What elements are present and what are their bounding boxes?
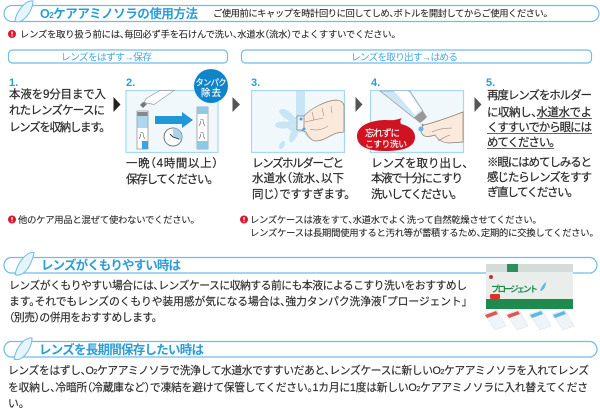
callout: rub without forgetting [357, 118, 415, 151]
step 3: 水道水（流水、以下 [252, 171, 344, 185]
step 3 [251, 77, 350, 201]
arrow: step 2 to 3 [232, 97, 240, 112]
label: take out and insert [242, 50, 592, 64]
step 4: 4. [371, 77, 380, 89]
step 4: 本液で十分にこすり [371, 171, 463, 185]
text: foggy lens advice: ます。それでもレンズのくもりや装用感が気になる場合は、強力タンパク洗浄液「プロージェント」 [9, 294, 467, 308]
icon: contact lens [15, 252, 34, 275]
heading: long-term storage: レンズを長期間保存したい時は [39, 342, 204, 357]
step 3: レンズホルダーごと [252, 156, 344, 170]
heading: usage: O2ケアアミノソラの使用方法 [40, 6, 198, 21]
step 5: に収納し、水道水でよ [487, 105, 592, 119]
label: take out and insert: レンズを取り出す→はめる [351, 50, 458, 64]
text: long-term storage advice [8, 363, 589, 408]
label: remove and store [8, 50, 228, 64]
step 2: 保存してください。 [126, 172, 213, 186]
icon: contact lens [15, 1, 33, 22]
step 5: めてください。 [487, 136, 555, 149]
step 1: 本液を9分目まで入 [9, 87, 106, 101]
callout: wash hands: レンズを取り扱う前には、毎回必ず手を石けんで洗い、水道水（流水）でよくすすいでください。 [20, 28, 396, 40]
step 2 [126, 69, 228, 186]
step 5: 感じたらレンズをすす [487, 170, 592, 184]
callout: rub without forgetting: 忘れずに [365, 128, 400, 140]
illustration: overnight storage [126, 90, 218, 152]
badge: protein removal [194, 69, 228, 103]
arrow: step 1 to 2 [114, 97, 120, 112]
step 5 [486, 77, 592, 199]
icon: contact lens [14, 338, 32, 360]
panel: foggy lens header [4, 252, 597, 275]
step 4 [357, 77, 468, 201]
panel: long-term storage header [4, 338, 597, 360]
step 3: 同じ）ですすぎます。 [252, 187, 350, 201]
text: foggy lens advice: （別売）の併用をおすすめします。 [9, 310, 157, 324]
text: long-term storage advice: を収納し、冷暗所（冷蔵庫など）で凍結を避けて保管してください。1カ月に1度は新しいO2ケアアミノソラに入れ替えてくださ [8, 380, 588, 394]
text: foggy lens advice [9, 278, 467, 324]
label: remove and store: レンズをはずす→保存 [61, 50, 152, 64]
step 2: 一晩（4時間以上） [126, 157, 218, 170]
step 4: レンズを取り出し、 [371, 156, 468, 170]
illustration: rinsing under water [252, 90, 344, 152]
step 5: 5. [486, 77, 495, 89]
product image: Progent package: プロージェント [491, 284, 538, 294]
step 2: 2. [126, 77, 135, 89]
text: foggy lens advice: レンズがくもりやすい場合には、レンズケースに収納する前にも本液によるこすり洗いをおすすめし [9, 278, 467, 292]
heading: foggy lens: レンズがくもりやすい時は [41, 258, 181, 272]
step 5: くすすいでから眼には [487, 121, 592, 134]
step 5: ※眼にはめてしみると [487, 156, 592, 169]
step 4: 洗いしてください。 [371, 188, 457, 201]
step 1: 1. [9, 77, 18, 89]
badge: protein removal: タンパク [196, 78, 226, 88]
text: long-term storage advice: レンズをはずし、O2ケアアミノソラで洗浄して水道水ですすいだあと、レンズケースに新しいO2ケアアミノソラを入れてレンズ [8, 363, 589, 377]
badge: protein removal: 除去 [201, 87, 221, 99]
product image: Progent package [484, 264, 574, 330]
step 1: れたレンズケースに [9, 103, 105, 117]
arrow: step 3 to 4 [356, 97, 362, 112]
step 5: 再度レンズをホルダー [487, 88, 592, 102]
callout: do not mix: 他のケア用品と混ぜて使わないでください。 [18, 214, 195, 225]
illustration: overnight storage: 八 [198, 119, 206, 127]
illustration: rubbing with solution [370, 90, 464, 152]
illustration: overnight storage: 八 [138, 132, 146, 140]
step 3: 3. [251, 77, 260, 89]
illustration: overnight storage: 八 [198, 132, 206, 140]
step 1: レンズを収納します。 [9, 120, 105, 134]
panel: usage header bar [4, 1, 599, 22]
step 5: ぎ直してください。 [487, 185, 573, 199]
arrow: step 4 to 5 [474, 97, 482, 112]
callout: lens case care [240, 214, 594, 238]
text: opening instruction: ご使用前にキャップを時計回りに回してしめ、ボトルを開封してからご使用ください。 [213, 8, 548, 18]
callout: rub without forgetting: こすり洗い [365, 138, 407, 149]
callout: lens case care: レンズケースは液をすて、水道水でよく洗って自然乾燥させてください。 [250, 214, 537, 225]
callout: lens case care: レンズケースは長期間使用すると汚れ等が蓄積するため、定期的に交換してください。 [250, 227, 594, 238]
step 1 [9, 77, 106, 134]
